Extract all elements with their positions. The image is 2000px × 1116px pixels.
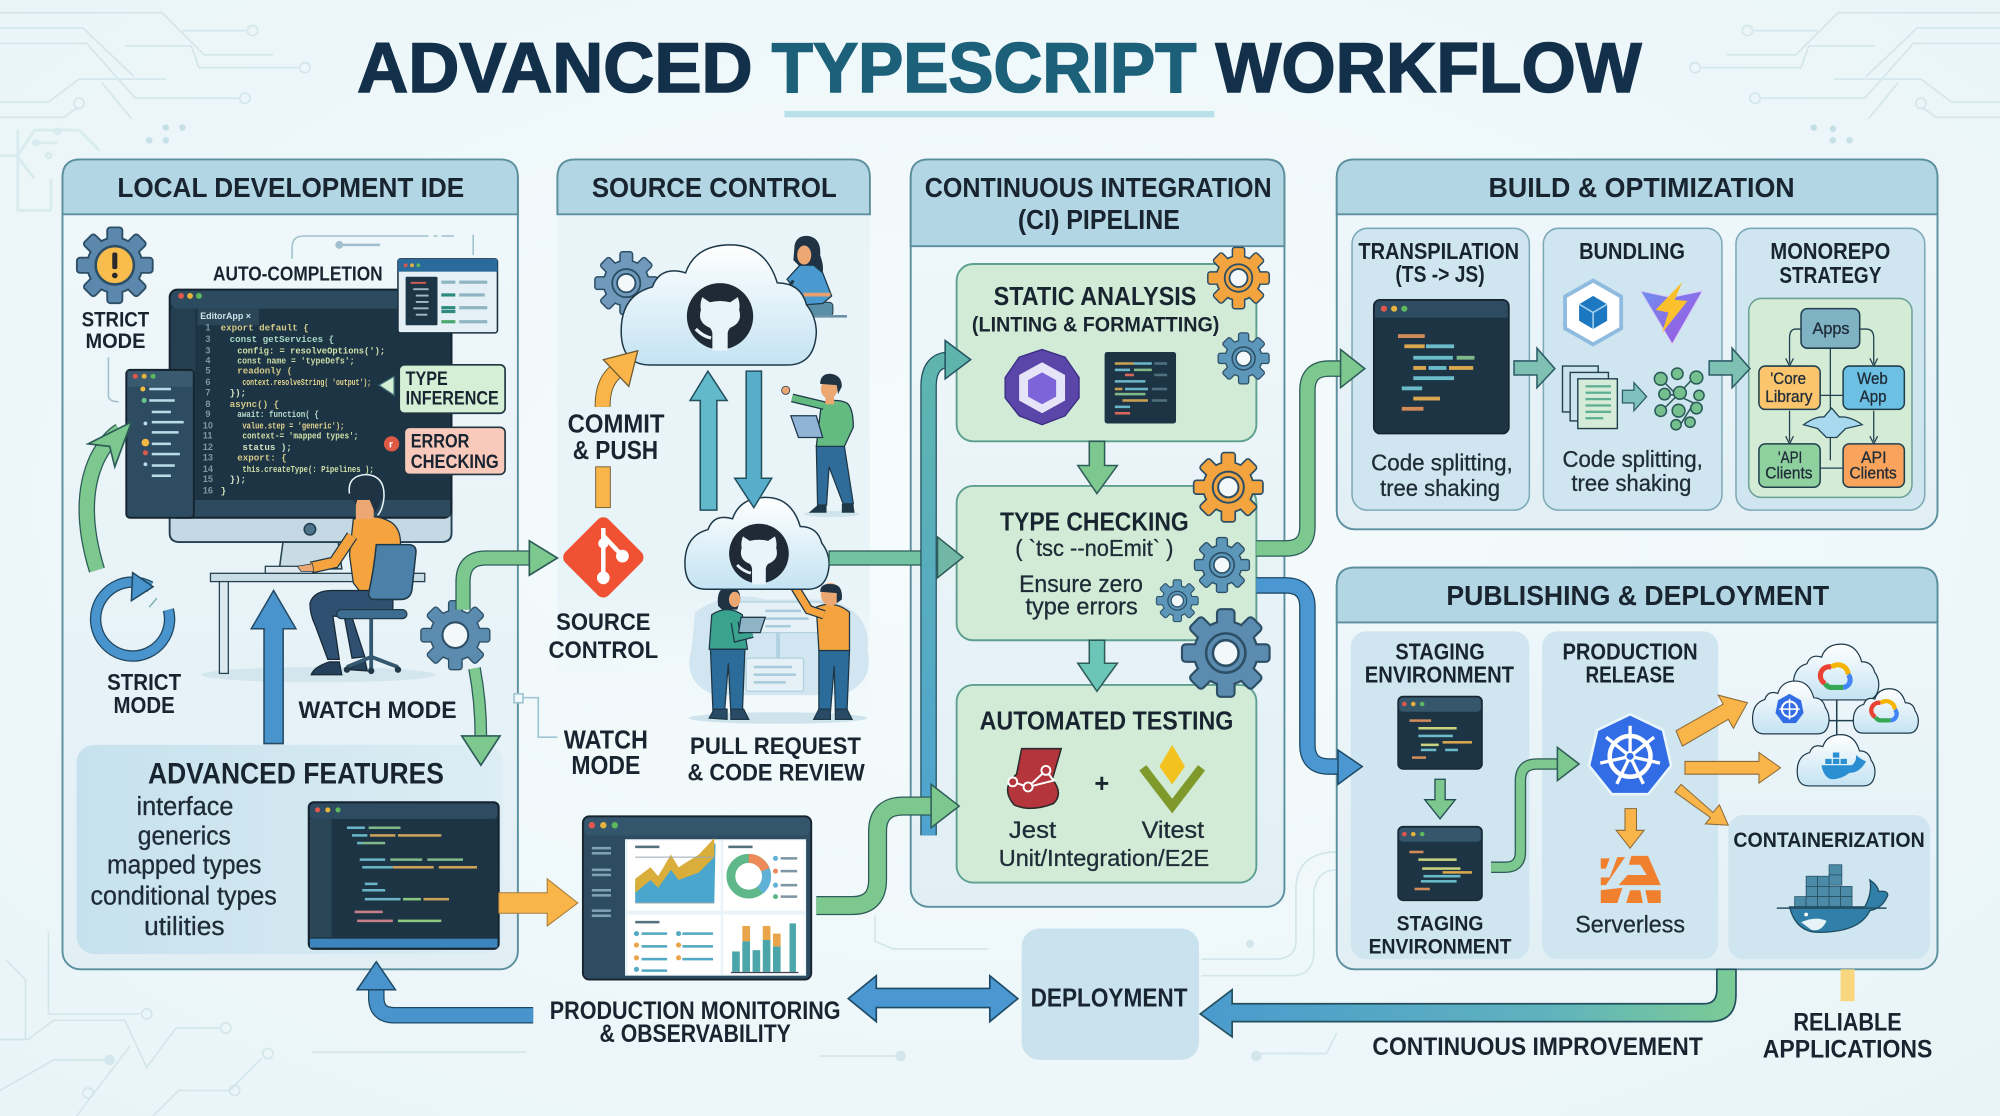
column: containerization bbox=[1728, 815, 1930, 959]
diagram: monorepo bbox=[1749, 298, 1912, 497]
icon: eslint bbox=[1005, 349, 1079, 425]
code review scene bbox=[689, 580, 869, 724]
callout: error checking: r bbox=[389, 440, 393, 451]
panel: local development IDE bbox=[62, 159, 518, 969]
arrow: staging to production bbox=[1491, 747, 1579, 867]
arrow: transpilation to bundling bbox=[1514, 348, 1555, 388]
column: monorepo strategy: STRATEGY bbox=[1779, 262, 1881, 288]
label: strict mode bbox=[82, 307, 149, 353]
icon: google cloud small bbox=[1853, 689, 1918, 733]
monitor with code editor: await: function( { bbox=[237, 409, 319, 420]
arrow: documents to tree bbox=[1622, 383, 1647, 411]
column: production release bbox=[1542, 631, 1718, 959]
monitor with code editor: 7 bbox=[205, 387, 210, 397]
code window: staging top bbox=[1398, 696, 1482, 769]
icon: kubernetes cloud bbox=[1753, 681, 1829, 734]
code window: transpiled output bbox=[1374, 300, 1509, 434]
label: pull request and code review: & CODE REVIEW bbox=[688, 760, 865, 787]
monitor with code editor: context.resolveString( 'output'); bbox=[242, 377, 371, 388]
diagram: monorepo: Library bbox=[1765, 387, 1813, 406]
arrow: strict mode up to explorer bbox=[87, 422, 131, 570]
label: strict mode lower: STRICT bbox=[107, 669, 181, 695]
column: bundling: Code splitting, bbox=[1562, 446, 1703, 472]
arrow: continuous improvement bbox=[1200, 969, 1736, 1037]
icon: serverless bbox=[1601, 856, 1661, 903]
monitor with code editor: }); bbox=[230, 474, 246, 485]
arrow: features to dashboard bbox=[499, 879, 578, 926]
icon: code thumbnail bbox=[1105, 352, 1176, 423]
arrow: gear to advanced features bbox=[462, 668, 500, 765]
monitor with code editor: 6 bbox=[205, 377, 210, 387]
column: transpilation: tree shaking bbox=[1380, 475, 1500, 501]
arrow: static analysis to type checking bbox=[1078, 441, 1117, 494]
monitor with code editor: } bbox=[221, 486, 226, 497]
arrow: cloud to PR up bbox=[690, 371, 727, 510]
monitor with code editor: 3 bbox=[205, 334, 210, 344]
label: watch mode: MODE bbox=[571, 752, 640, 780]
arrow: monitoring and deployment two-way bbox=[848, 976, 1018, 1022]
monitor with code editor: 1 bbox=[205, 322, 210, 332]
heading: CI pipeline: CONTINUOUS INTEGRATION bbox=[925, 172, 1272, 203]
monitor with code editor: 16 bbox=[203, 486, 213, 496]
heading: advanced features: ADVANCED FEATURES bbox=[148, 758, 444, 791]
sub-panel: advanced features bbox=[77, 745, 503, 954]
list: advanced features: mapped types bbox=[107, 852, 261, 880]
card: automated testing: Unit/Integration/E2E bbox=[999, 845, 1209, 871]
label: strict mode lower: MODE bbox=[114, 692, 175, 718]
diagram: monorepo: Clients bbox=[1765, 463, 1813, 482]
column: bundling: BUNDLING bbox=[1579, 238, 1685, 264]
column: staging environment: STAGING bbox=[1397, 910, 1483, 935]
diagram: monorepo: 'Core bbox=[1770, 369, 1806, 388]
callout: error checking bbox=[384, 427, 505, 474]
label: strict mode lower bbox=[107, 669, 181, 718]
monitor with code editor: config: = resolveOptions('); bbox=[237, 345, 385, 356]
code window: advanced features bbox=[309, 802, 499, 949]
arrow: features up to desk bbox=[251, 591, 296, 744]
chart: bar chart bbox=[731, 923, 798, 973]
column: staging environment bbox=[1351, 631, 1529, 959]
group: cloud targets bbox=[1753, 644, 1918, 786]
monitor with code editor: 5 bbox=[205, 366, 210, 376]
monitor with code editor: 11 bbox=[203, 431, 213, 441]
monitor with code editor: }); bbox=[230, 387, 246, 398]
list: advanced features: generics bbox=[138, 822, 231, 850]
diagram: monorepo: Apps bbox=[1812, 319, 1849, 338]
heading: source control: SOURCE CONTROL bbox=[592, 172, 837, 203]
column: bundling: tree shaking bbox=[1571, 470, 1691, 496]
monitor with code editor: 12 bbox=[203, 442, 213, 452]
icon: webpack bbox=[1565, 281, 1621, 344]
title bbox=[357, 28, 1642, 117]
icon: gears cluster type checking bbox=[1157, 453, 1268, 696]
heading: CI pipeline: (CI) PIPELINE bbox=[1018, 204, 1180, 235]
label: pull request and code review: PULL REQUEST bbox=[690, 733, 861, 760]
arrow: type checking to publishing bbox=[1256, 585, 1362, 784]
icon: code split documents bbox=[1562, 366, 1617, 429]
monitor with code editor: 15 bbox=[203, 474, 213, 484]
card: static analysis bbox=[957, 264, 1256, 441]
arrow: monitoring back to local IDE bbox=[357, 962, 533, 1015]
arrow: gear to git bbox=[463, 541, 557, 610]
panel: build and optimization bbox=[1337, 159, 1938, 529]
callout: type inference: INFERENCE bbox=[406, 388, 499, 409]
card: automated testing: + bbox=[1094, 770, 1109, 798]
heading: publishing and deployment: PUBLISHING & DEPLOYMENT bbox=[1446, 580, 1829, 611]
column: containerization: CONTAINERIZATION bbox=[1733, 827, 1925, 852]
diagram: monorepo: Web bbox=[1857, 369, 1888, 388]
title: WORKFLOW bbox=[1216, 28, 1642, 107]
label: strict mode: MODE bbox=[85, 328, 145, 353]
diagram: monorepo: Clients bbox=[1849, 463, 1897, 482]
chart: donut bbox=[731, 856, 797, 899]
column: staging environment: ENVIRONMENT bbox=[1365, 661, 1514, 687]
monitor with code editor: context-= 'mapped types'; bbox=[242, 431, 358, 442]
icon: docker whale bbox=[1777, 865, 1888, 932]
icon: vitest bbox=[1143, 745, 1202, 806]
label: watch mode: WATCH MODE bbox=[298, 697, 457, 724]
card: type checking: TYPE CHECKING bbox=[1000, 509, 1189, 537]
card: automated testing: AUTOMATED TESTING bbox=[980, 708, 1233, 736]
title: TYPESCRIPT bbox=[772, 28, 1197, 107]
card: automated testing: Jest bbox=[1009, 817, 1056, 844]
dashboard: production monitoring bbox=[583, 816, 811, 980]
callout: error checking: ERROR bbox=[411, 432, 470, 453]
icon: gear bbox=[596, 253, 657, 314]
label: source control: SOURCE bbox=[556, 609, 651, 636]
icon: vite bbox=[1640, 282, 1703, 344]
column: monorepo strategy bbox=[1736, 228, 1925, 510]
icon: cloud with GitHub logo lower bbox=[685, 497, 829, 589]
icon: settings gear bbox=[422, 601, 489, 669]
box: deployment bbox=[1022, 929, 1199, 1060]
arrow: kubernetes to serverless bbox=[1616, 809, 1644, 848]
monitor with code editor: export default { bbox=[221, 322, 309, 333]
monitor with code editor: value.step = 'generic'); bbox=[242, 421, 344, 432]
arrow: git to cloud bbox=[596, 351, 638, 508]
arrow: cloud to PR down bbox=[735, 371, 772, 508]
list: metrics bbox=[634, 931, 713, 972]
box: deployment: DEPLOYMENT bbox=[1031, 984, 1188, 1012]
icon: cloud with GitHub logo bbox=[621, 245, 816, 365]
monitor with code editor: 13 bbox=[203, 452, 213, 462]
heading: local development IDE: LOCAL DEVELOPMENT IDE bbox=[117, 172, 464, 203]
column: transpilation: Code splitting, bbox=[1371, 450, 1513, 476]
card: type checking: ( `tsc --noEmit` ) bbox=[1015, 535, 1173, 561]
title: ADVANCED bbox=[357, 28, 753, 107]
label: commit and push: & PUSH bbox=[573, 437, 658, 465]
monitor with code editor: this.createType(: Pipelines ); bbox=[242, 464, 374, 475]
card: type checking: type errors bbox=[1026, 594, 1138, 621]
monitor with code editor: export: { bbox=[237, 452, 287, 463]
panel: source control bbox=[514, 159, 870, 787]
monitor with code editor: readonly ( bbox=[237, 366, 292, 377]
column: production release: PRODUCTION bbox=[1562, 638, 1698, 664]
diagram: monorepo: App bbox=[1860, 387, 1886, 406]
arrow: PR to CI bbox=[829, 537, 963, 578]
heading: CI pipeline bbox=[925, 172, 1272, 235]
monitor with code editor: 4 bbox=[205, 355, 211, 365]
card: type checking bbox=[957, 486, 1256, 640]
column: transpilation: TRANSPILATION bbox=[1358, 238, 1519, 264]
column: staging environment: STAGING bbox=[1395, 638, 1485, 664]
card: automated testing bbox=[957, 685, 1256, 883]
monitor with code editor: 9 bbox=[205, 409, 210, 419]
person: reviewer right bbox=[789, 580, 852, 719]
icon: jest bbox=[1008, 749, 1061, 808]
label: production monitoring bbox=[550, 997, 841, 1048]
panel: publishing and deployment bbox=[1337, 568, 1938, 969]
window: file explorer bbox=[126, 370, 194, 518]
list: advanced features: utilities bbox=[144, 913, 224, 941]
arrow: to static analysis bbox=[929, 341, 971, 835]
icon: google cloud large bbox=[1793, 644, 1879, 700]
label: reliable applications bbox=[1763, 1009, 1932, 1063]
monitor with code editor: 3 bbox=[205, 345, 210, 355]
label: reliable applications: RELIABLE bbox=[1793, 1009, 1902, 1037]
panel: continuous integration pipeline bbox=[911, 159, 1284, 907]
code window: staging bottom bbox=[1398, 826, 1482, 900]
icon: strict mode gear bbox=[78, 228, 152, 302]
list: advanced features: conditional types bbox=[91, 882, 277, 910]
icon: gears cluster static analysis bbox=[1209, 248, 1268, 383]
arrow: monitoring to testing bbox=[816, 784, 959, 906]
column: bundling bbox=[1543, 228, 1722, 510]
list: advanced features bbox=[91, 793, 277, 941]
column: staging environment: ENVIRONMENT bbox=[1369, 933, 1511, 958]
icon: module tree bbox=[1654, 368, 1704, 430]
label: strict mode: STRICT bbox=[82, 307, 149, 332]
label: reliable applications: APPLICATIONS bbox=[1763, 1035, 1932, 1063]
label: pull request and code review bbox=[688, 733, 865, 787]
window: auto-completion suggestions bbox=[398, 259, 497, 333]
label: production monitoring: & OBSERVABILITY bbox=[599, 1020, 791, 1048]
arrow: kubernetes to containerization bbox=[1675, 784, 1728, 825]
card: type checking: Ensure zero bbox=[1019, 571, 1143, 598]
monitor with code editor: async() { bbox=[230, 399, 279, 410]
monitor with code editor: 8 bbox=[205, 399, 210, 409]
arrow: bundling to monorepo bbox=[1709, 348, 1750, 388]
callout: type inference bbox=[379, 365, 505, 413]
chart: area chart bbox=[635, 838, 716, 903]
monitor with code editor bbox=[170, 290, 452, 569]
person: developer with laptop bbox=[782, 374, 860, 517]
label: commit and push: COMMIT bbox=[568, 410, 665, 438]
label: continuous improvement: CONTINUOUS IMPROVEMENT bbox=[1372, 1033, 1703, 1061]
card: static analysis: (LINTING & FORMATTING) bbox=[972, 312, 1219, 337]
icon: git logo bbox=[560, 514, 647, 601]
icon: refresh loop bbox=[96, 573, 170, 656]
diagram: monorepo: 'API bbox=[1778, 448, 1802, 467]
column: monorepo strategy: MONOREPO bbox=[1770, 238, 1890, 264]
column: production release: Serverless bbox=[1575, 911, 1685, 938]
column: transpilation bbox=[1352, 228, 1529, 510]
label: production monitoring: PRODUCTION MONITORING bbox=[550, 997, 841, 1025]
developer at desk bbox=[202, 474, 436, 682]
monitor with code editor: 14 bbox=[203, 464, 214, 474]
monitor with code editor: 10 bbox=[203, 421, 213, 431]
card: automated testing: Vitest bbox=[1142, 817, 1204, 844]
monitor with code editor: const getServices { bbox=[230, 334, 334, 345]
label: source control bbox=[548, 609, 658, 664]
label: watch mode: WATCH bbox=[564, 727, 648, 755]
arrow: kubernetes to docker cloud bbox=[1685, 753, 1781, 783]
label: source control: CONTROL bbox=[548, 637, 658, 664]
label: auto-completion: AUTO-COMPLETION bbox=[213, 264, 383, 286]
monitor with code editor: const name = 'typeDefs'; bbox=[237, 355, 355, 366]
person: collaborator at cloud bbox=[777, 236, 847, 316]
person: reviewer left bbox=[709, 587, 765, 719]
monitor with code editor: status ); bbox=[242, 442, 292, 453]
card: static analysis: STATIC ANALYSIS bbox=[994, 283, 1196, 311]
callout: type inference: TYPE bbox=[406, 369, 448, 390]
icon: docker cloud bbox=[1797, 735, 1875, 786]
arrow: kubernetes to clouds bbox=[1676, 695, 1747, 746]
arrow: staging down bbox=[1425, 779, 1455, 819]
icon: kubernetes bbox=[1589, 714, 1671, 794]
label: commit and push bbox=[568, 410, 665, 465]
heading: build and optimization: BUILD & OPTIMIZATION bbox=[1489, 172, 1795, 203]
label: watch mode bbox=[564, 727, 648, 780]
column: transpilation: (TS -> JS) bbox=[1395, 261, 1485, 287]
diagram: monorepo: API bbox=[1861, 448, 1886, 467]
column: production release: RELEASE bbox=[1585, 661, 1675, 687]
connector: reliable applications bbox=[1841, 969, 1855, 1001]
arrow: type checking to testing bbox=[1078, 640, 1117, 691]
list: advanced features: interface bbox=[136, 793, 233, 821]
arrow: type checking to build bbox=[1256, 349, 1365, 548]
callout: error checking: CHECKING bbox=[411, 452, 499, 473]
monitor with code editor: EditorApp × bbox=[200, 311, 251, 321]
